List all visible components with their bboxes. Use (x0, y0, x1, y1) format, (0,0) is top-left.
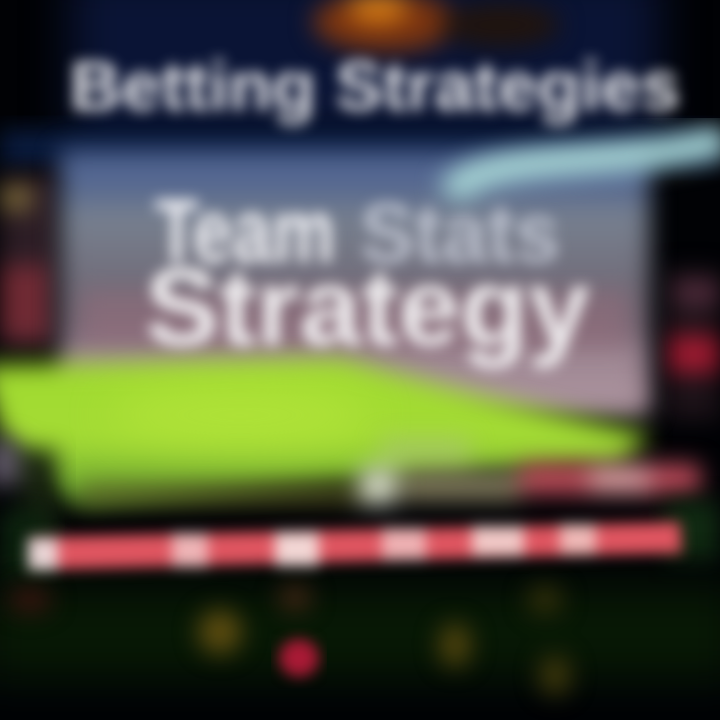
icon: red flower (279, 639, 319, 677)
bottom foliage (0, 500, 720, 680)
silhouette: left foreground (0, 440, 56, 550)
banner: red and white strip (28, 522, 682, 570)
heading: large panel words: Strategy (145, 246, 590, 369)
heading: large panel words: Stats (360, 186, 560, 280)
icon: orange glow at top (313, 0, 560, 52)
heading: large panel words: Team (155, 182, 335, 282)
icon: yellow flowers (8, 586, 571, 695)
field: green pitch (0, 358, 650, 505)
side panel: left stands (0, 175, 60, 350)
band: lower sideline (80, 438, 700, 504)
side panel: right stands (665, 270, 720, 420)
heading: large panel words (145, 182, 590, 369)
title: Betting Strategies (70, 47, 680, 125)
arrow: teal swoosh top right (450, 140, 720, 195)
panel: main stadium card (60, 150, 650, 415)
